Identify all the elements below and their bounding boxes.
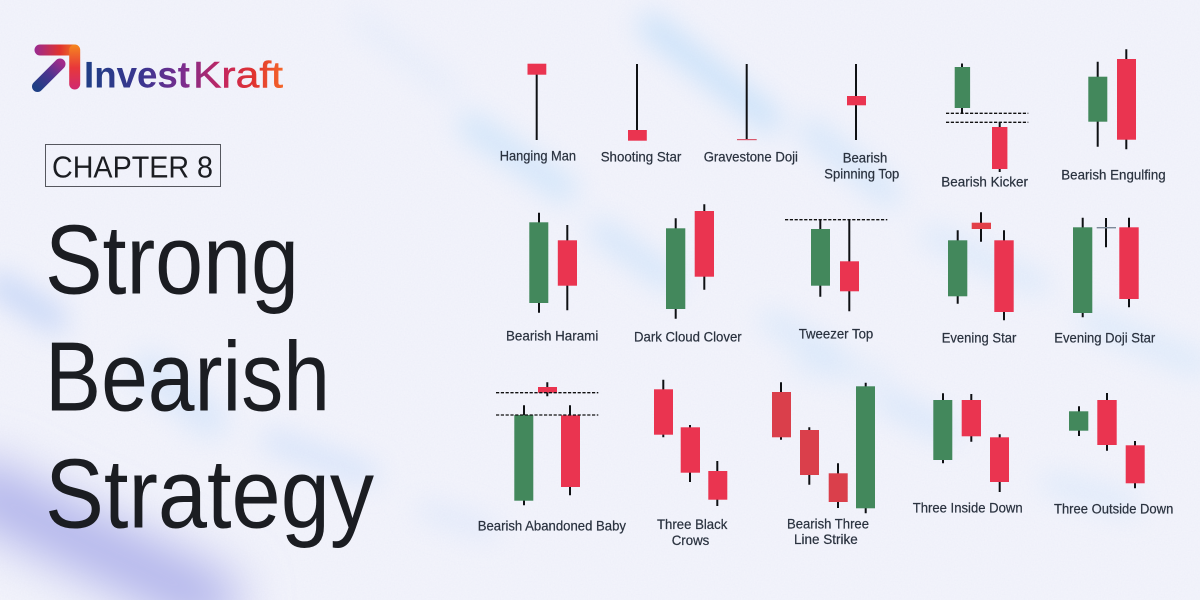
label: Bearish Three xyxy=(787,516,869,531)
title xyxy=(45,204,374,548)
pattern: Dark Cloud Clover xyxy=(634,204,742,345)
pattern: Evening Star xyxy=(942,212,1017,346)
logo wordmark xyxy=(84,54,284,95)
label: Bearish Engulfing xyxy=(1061,168,1166,183)
pattern: Evening Doji Star xyxy=(1054,218,1156,345)
pattern: Shooting Star xyxy=(601,64,682,165)
label: Dark Cloud Clover xyxy=(634,330,742,345)
label: Bearish Harami xyxy=(506,329,598,344)
label: Evening Star xyxy=(942,331,1017,346)
label: Tweezer Top xyxy=(799,327,874,342)
pattern: Bearish Three Line Strike: Line Strike xyxy=(794,532,858,547)
logo wordmark: Kraft xyxy=(193,54,284,95)
pattern: Gravestone Doji xyxy=(704,64,798,165)
label: Three Inside Down xyxy=(913,501,1023,516)
title: Strong xyxy=(45,204,299,314)
pattern: Bearish Spinning Top xyxy=(824,64,900,182)
logo wordmark: Invest xyxy=(84,54,190,95)
pattern: Bearish Abandoned Baby xyxy=(478,382,626,534)
pattern: Three Outside Down xyxy=(1054,393,1173,517)
logo arrow icon xyxy=(38,50,75,86)
pattern: Bearish Kicker xyxy=(941,64,1028,190)
pattern: Bearish Engulfing xyxy=(1061,49,1166,183)
label: Shooting Star xyxy=(601,150,682,165)
pattern: Three Black Crows: Crows xyxy=(672,533,709,548)
logo: InvestKraft xyxy=(38,50,284,95)
label: Bearish Abandoned Baby xyxy=(478,519,626,534)
title: Strategy xyxy=(45,438,374,548)
pattern: Three Inside Down xyxy=(913,393,1023,516)
label: Bearish xyxy=(843,150,887,165)
pattern: Bearish Harami xyxy=(506,213,598,344)
title: Bearish xyxy=(45,322,330,432)
chapter badge: CHAPTER 8 xyxy=(52,149,213,184)
pattern: Tweezer Top xyxy=(785,220,887,342)
label: Evening Doji Star xyxy=(1054,330,1156,345)
label: Three Black xyxy=(657,517,727,532)
pattern: Bearish Three Line Strike xyxy=(772,382,875,547)
label: Gravestone Doji xyxy=(704,150,798,165)
label: Hanging Man xyxy=(500,149,576,164)
label: Bearish Kicker xyxy=(941,175,1028,190)
pattern: Hanging Man xyxy=(500,64,576,164)
pattern: Three Black Crows xyxy=(654,380,727,548)
pattern: Bearish Spinning Top: Spinning Top xyxy=(824,167,900,182)
label: Three Outside Down xyxy=(1054,502,1173,517)
